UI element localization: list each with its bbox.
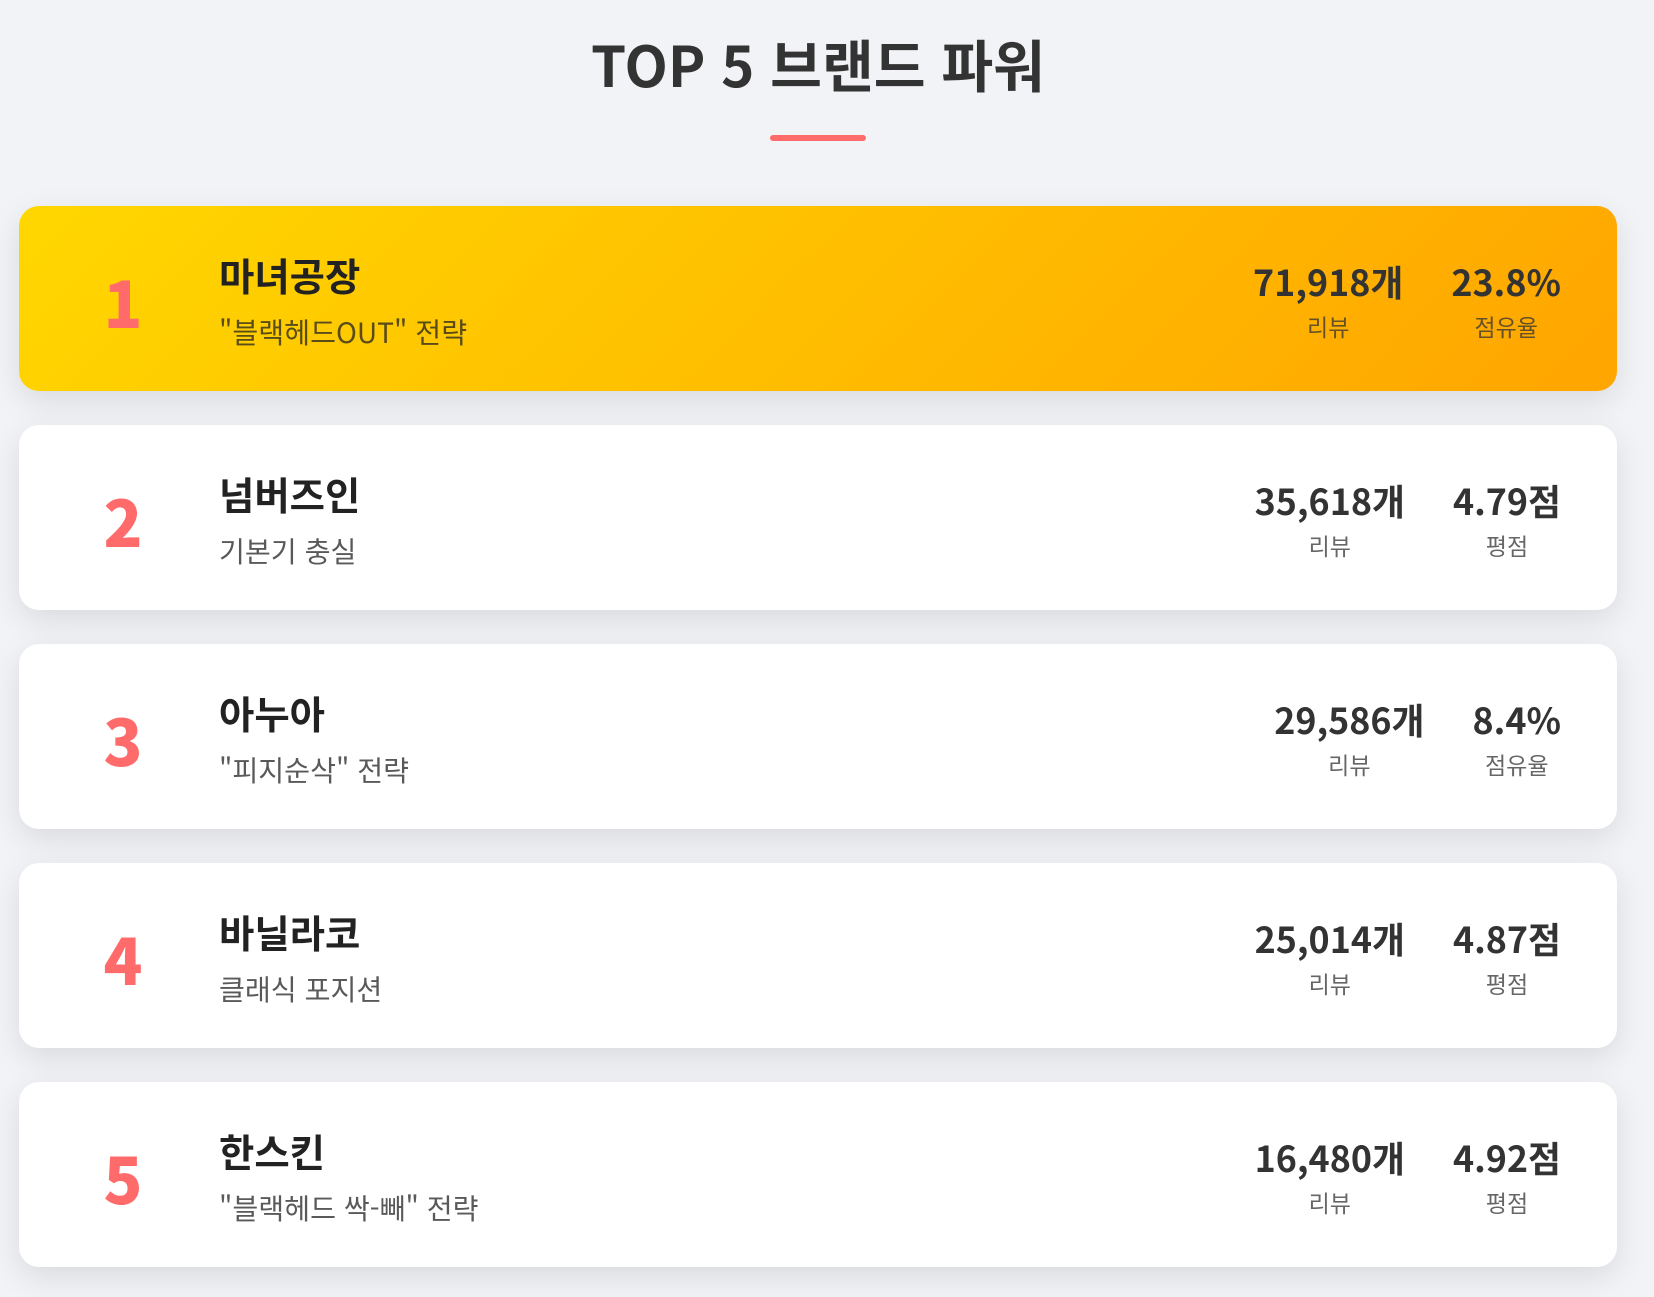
card: rank 4 바닐라코: 클래식 포지션 — [219, 968, 382, 1009]
stat: share: 점유율 — [1474, 309, 1538, 343]
stat: share: 점유율 — [1485, 747, 1549, 781]
card: rank 5 한스킨: 한스킨 — [219, 1123, 325, 1179]
stat: reviews: 71,918개 — [1253, 255, 1403, 307]
card: rank 3 아누아: "피지순삭" 전략 — [219, 749, 409, 790]
rank number 2: 2 — [104, 474, 142, 566]
stats — [1255, 1131, 1561, 1219]
card: rank 1 마녀공장 — [19, 206, 1617, 391]
stats — [1255, 912, 1561, 1000]
stat: rating: 평점 — [1486, 966, 1528, 1000]
stat: reviews: 리뷰 — [1309, 966, 1351, 1000]
stat: reviews: 16,480개 — [1255, 1131, 1405, 1183]
stat: rating: 평점 — [1486, 528, 1528, 562]
card: rank 4 바닐라코 — [19, 863, 1617, 1048]
card: rank 2 넘버즈인: 넘버즈인 — [219, 466, 360, 522]
card: rank 1 마녀공장: 마녀공장 — [219, 247, 360, 303]
brand info — [219, 466, 360, 571]
rank number 3: 3 — [104, 693, 142, 785]
stats — [1253, 255, 1561, 343]
stats — [1274, 693, 1561, 781]
stat: reviews: 리뷰 — [1307, 309, 1349, 343]
stat: reviews: 리뷰 — [1309, 1185, 1351, 1219]
stat: reviews — [1255, 1131, 1405, 1219]
card: rank 1 마녀공장: "블랙헤드OUT" 전략 — [219, 311, 467, 352]
stat: reviews: 리뷰 — [1309, 528, 1351, 562]
stat: rating — [1453, 1131, 1561, 1219]
stat: rating: 평점 — [1486, 1185, 1528, 1219]
stat: reviews: 리뷰 — [1328, 747, 1371, 781]
rank number 4: 4 — [104, 912, 142, 1004]
stat: rating: 4.92점 — [1453, 1131, 1561, 1183]
stat: reviews — [1253, 255, 1403, 343]
card: rank 4 바닐라코: 바닐라코 — [219, 904, 360, 960]
stat: reviews — [1255, 912, 1405, 1000]
rank number 1: 1 — [104, 255, 142, 347]
stat: share — [1451, 255, 1561, 343]
brand info — [219, 247, 467, 352]
brand info — [219, 1123, 479, 1228]
rank number 5: 5 — [104, 1131, 142, 1223]
stat: reviews: 35,618개 — [1255, 474, 1405, 526]
card: rank 5 한스킨: "블랙헤드 싹-빼" 전략 — [219, 1187, 479, 1228]
stat: rating — [1453, 912, 1561, 1000]
stat: share: 23.8% — [1451, 255, 1561, 307]
stats — [1255, 474, 1561, 562]
stat: reviews: 25,014개 — [1255, 912, 1405, 964]
title underline — [770, 135, 866, 141]
stat: reviews: 29,586개 — [1274, 693, 1425, 745]
stat: reviews — [1274, 693, 1425, 781]
stat: rating — [1453, 474, 1561, 562]
title: TOP 5 브랜드 파워 — [591, 23, 1045, 104]
stat: share: 8.4% — [1473, 693, 1561, 745]
stat: share — [1473, 693, 1561, 781]
brand info — [219, 904, 382, 1009]
card: rank 5 한스킨 — [19, 1082, 1617, 1267]
card: rank 2 넘버즈인 — [19, 425, 1617, 610]
card: rank 3 아누아 — [19, 644, 1617, 829]
card: rank 3 아누아: 아누아 — [219, 685, 325, 741]
stat: reviews — [1255, 474, 1405, 562]
card: rank 2 넘버즈인: 기본기 충실 — [219, 530, 356, 571]
stat: rating: 4.87점 — [1453, 912, 1561, 964]
brand info — [219, 685, 409, 790]
stat: rating: 4.79점 — [1453, 474, 1561, 526]
